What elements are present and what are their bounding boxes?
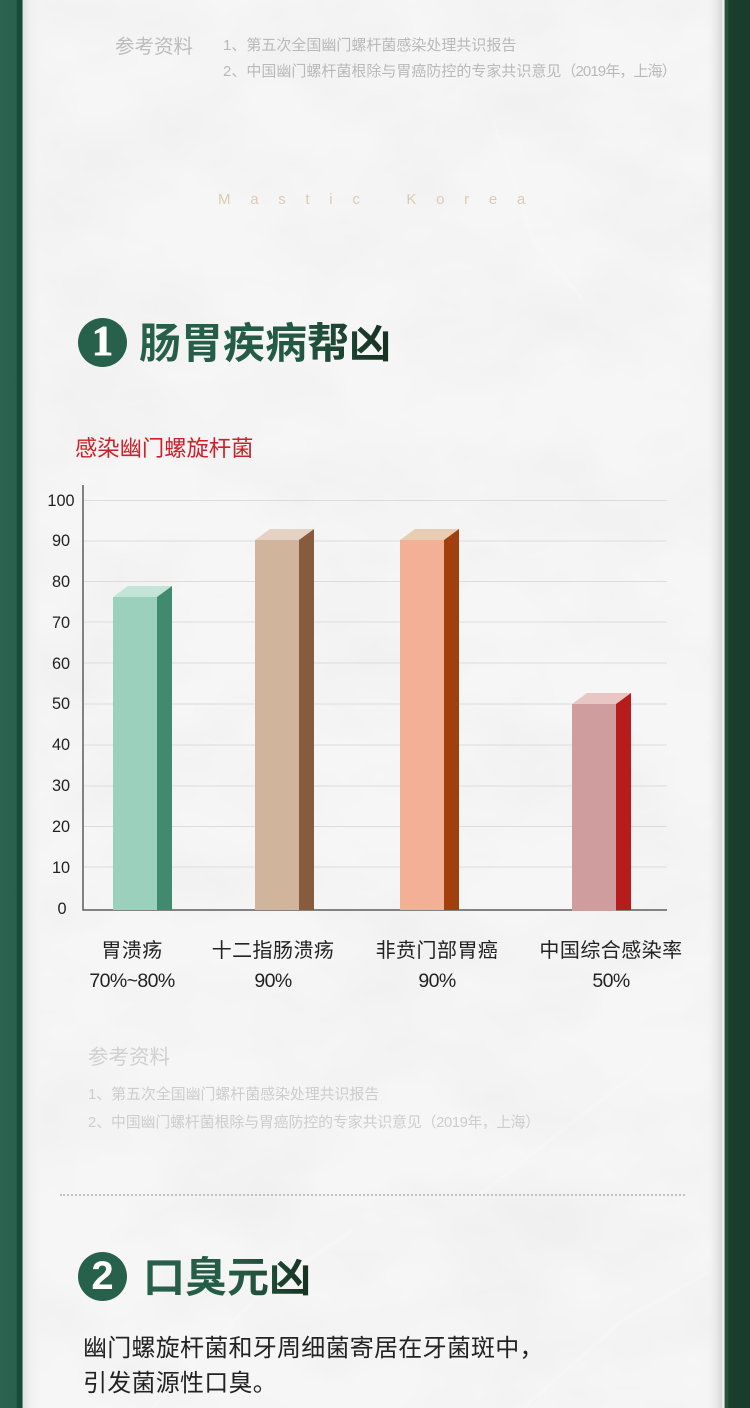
body text <box>83 1335 544 1397</box>
references heading: 参考资料 <box>88 1046 170 1069</box>
y axis labels: 60 <box>52 655 70 673</box>
category labels: 非贲门部胃癌 <box>376 940 498 962</box>
brand text: Mastic Korea <box>218 191 545 208</box>
number badge 2: 2 <box>91 1254 114 1298</box>
category labels: 胃溃疡 <box>101 940 163 962</box>
left green border <box>0 0 23 1408</box>
chart title: 感染幽门螺旋杆菌 <box>75 436 253 461</box>
body text: 幽门螺旋杆菌和牙周细菌寄居在牙菌斑中， <box>83 1335 544 1362</box>
heading text 1: 肠胃疾病帮凶 <box>139 320 391 367</box>
category labels: 50% <box>592 970 630 992</box>
y axis labels: 30 <box>52 777 70 795</box>
y axis labels: 70 <box>52 614 70 632</box>
number badge 2 <box>78 1252 127 1301</box>
category labels: 十二指肠溃疡 <box>212 940 334 962</box>
right green border <box>723 0 750 1408</box>
reference list: 2、中国幽门螺杆菌根除与胃癌防控的专家共识意见（2019年，上海） <box>223 63 676 80</box>
grid lines <box>84 500 667 867</box>
body text: 引发菌源性口臭。 <box>83 1370 277 1397</box>
number badge 1 <box>78 318 127 367</box>
bar: 胃溃疡 <box>113 586 172 910</box>
category labels: 中国综合感染率 <box>539 940 683 962</box>
references block: bottom <box>88 1046 539 1131</box>
bar: 十二指肠溃疡 <box>255 529 314 910</box>
section heading 1 <box>78 318 391 367</box>
category labels: 90% <box>254 970 292 992</box>
y axis labels <box>47 492 75 918</box>
y axis labels: 80 <box>52 573 70 591</box>
section heading 2 <box>78 1252 311 1301</box>
reference list: 1、第五次全国幽门螺杆菌感染处理共识报告 <box>223 37 516 54</box>
y axis labels: 10 <box>52 859 70 877</box>
y axis labels: 20 <box>52 818 70 836</box>
y axis labels: 90 <box>52 532 70 550</box>
reference list: 2、中国幽门螺杆菌根除与胃癌防控的专家共识意见（2019年，上海） <box>88 1115 539 1131</box>
y axis labels: 100 <box>47 492 75 510</box>
axes <box>83 485 667 910</box>
bar: 非贲门部胃癌 <box>400 529 459 910</box>
category labels <box>89 940 683 992</box>
y axis labels: 0 <box>57 900 67 918</box>
bar: 中国综合感染率 <box>572 693 631 911</box>
category labels: 70%~80% <box>89 970 175 992</box>
category labels: 90% <box>418 970 456 992</box>
reference list <box>223 37 676 80</box>
heading text 2: 口臭元凶 <box>143 1254 311 1301</box>
reference list: 1、第五次全国幽门螺杆菌感染处理共识报告 <box>88 1087 379 1103</box>
reference list <box>88 1086 539 1131</box>
references block: top <box>115 36 676 80</box>
y axis labels: 50 <box>52 695 70 713</box>
number badge 1: 1 <box>92 319 113 365</box>
y axis labels: 40 <box>52 736 70 754</box>
references heading: 参考资料 <box>115 36 193 58</box>
bar chart <box>47 485 667 918</box>
